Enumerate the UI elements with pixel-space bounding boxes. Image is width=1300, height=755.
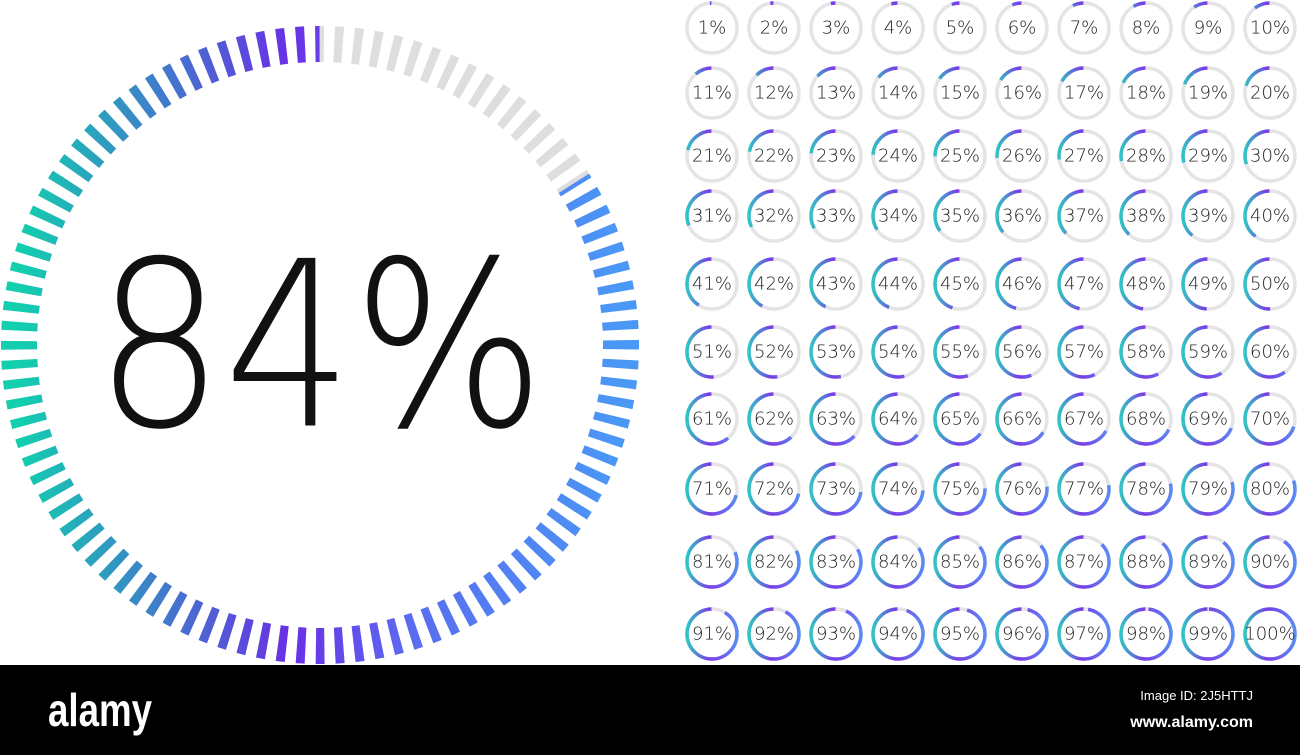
row 2 [687, 68, 1295, 118]
row 8: 72% [754, 478, 794, 500]
row 9: 90% [1250, 552, 1290, 572]
row 10: 96% [1002, 624, 1042, 644]
row 3: 30% [1250, 146, 1290, 166]
row 7: 65% [940, 408, 980, 430]
row 2: 15% [940, 82, 980, 104]
row 8: 78% [1126, 478, 1166, 500]
row 4: 39% [1188, 206, 1228, 226]
row 4: 34% [878, 206, 918, 226]
row 10: 97% [1064, 624, 1104, 644]
row 2: 19% [1188, 82, 1228, 104]
row 10: 93% [816, 624, 856, 644]
row 4: 35% [940, 206, 980, 226]
row 1: 9% [1194, 18, 1222, 38]
row 9: 85% [940, 552, 980, 572]
row 2: 13% [816, 82, 856, 104]
row 10 [687, 609, 1296, 659]
row 9: 81% [692, 552, 732, 572]
row 2: 11% [692, 82, 732, 104]
row 5: 47% [1064, 274, 1104, 294]
row 7: 69% [1188, 408, 1228, 430]
website: www.alamy.com [1129, 714, 1253, 731]
row 6 [687, 327, 1295, 377]
row 6: 52% [754, 342, 794, 362]
row 3: 28% [1126, 146, 1166, 166]
row 6: 59% [1188, 342, 1228, 362]
row 3: 21% [692, 146, 732, 166]
row 9: 88% [1126, 552, 1166, 572]
row 9: 83% [816, 552, 856, 572]
row 1: 6% [1008, 18, 1036, 38]
row 1: 10% [1250, 18, 1290, 38]
row 8: 80% [1250, 478, 1290, 500]
row 8 [687, 464, 1295, 514]
row 5: 50% [1250, 274, 1290, 294]
row 1: 4% [884, 18, 912, 38]
image id: Image ID: 2J5HTTJ [1140, 688, 1253, 703]
row 6: 54% [878, 342, 918, 362]
row 1: 2% [760, 18, 788, 38]
row 7: 62% [754, 408, 794, 430]
row 4: 33% [816, 206, 856, 226]
row 3: 22% [754, 146, 794, 166]
row 5: 48% [1126, 274, 1166, 294]
row 8: 73% [816, 478, 856, 500]
row 8: 79% [1188, 478, 1228, 500]
row 6: 57% [1064, 342, 1104, 362]
grid of small percentage dials [687, 3, 1296, 659]
row 8: 74% [878, 478, 918, 500]
row 3: 23% [816, 146, 856, 166]
row 1: 5% [946, 18, 974, 38]
row 3: 29% [1188, 146, 1228, 166]
row 9 [687, 537, 1295, 587]
row 8: 75% [940, 478, 980, 500]
row 5: 43% [816, 274, 856, 294]
row 5: 41% [692, 274, 732, 294]
row 5: 49% [1188, 274, 1228, 294]
row 10: 92% [754, 624, 794, 644]
row 6: 56% [1002, 342, 1042, 362]
row 4: 32% [754, 206, 794, 226]
row 10: 95% [940, 624, 980, 644]
row 4: 40% [1250, 206, 1290, 226]
big percentage text: 84% [95, 214, 545, 480]
row 7: 67% [1064, 408, 1104, 430]
row 9: 89% [1188, 552, 1228, 572]
row 3: 25% [940, 146, 980, 166]
row 7: 61% [692, 408, 732, 430]
row 3 [687, 131, 1295, 181]
logo: alamy: alamy [48, 684, 152, 736]
row 5: 45% [940, 274, 980, 294]
row 7: 64% [878, 408, 918, 430]
row 9: 84% [878, 552, 918, 572]
row 6: 60% [1250, 342, 1290, 362]
row 2: 20% [1250, 82, 1290, 104]
row 1: 7% [1070, 18, 1098, 38]
row 7: 70% [1250, 408, 1290, 430]
row 7: 66% [1002, 408, 1042, 430]
row 1: 3% [822, 18, 850, 38]
row 9: 87% [1064, 552, 1104, 572]
row 4: 36% [1002, 206, 1042, 226]
row 2: 12% [754, 82, 794, 104]
row 8: 76% [1002, 478, 1042, 500]
row 7 [687, 394, 1295, 444]
row 6: 53% [816, 342, 856, 362]
footer bar [0, 665, 1300, 755]
row 7: 68% [1126, 408, 1166, 430]
row 8: 71% [692, 478, 732, 500]
row 2: 14% [878, 82, 918, 104]
row 4: 37% [1064, 206, 1104, 226]
row 4: 31% [692, 206, 732, 226]
row 10: 100% [1244, 624, 1296, 644]
row 5: 44% [878, 274, 918, 294]
row 2: 18% [1126, 82, 1166, 104]
row 1: 8% [1132, 18, 1160, 38]
row 10: 91% [692, 624, 732, 644]
row 3: 24% [878, 146, 918, 166]
row 7: 63% [816, 408, 856, 430]
row 6: 55% [940, 342, 980, 362]
row 9: 86% [1002, 552, 1042, 572]
row 5: 42% [754, 274, 794, 294]
row 5: 46% [1002, 274, 1042, 294]
row 6: 58% [1126, 342, 1166, 362]
row 10: 94% [878, 624, 918, 644]
row 2: 16% [1002, 82, 1042, 104]
row 9: 82% [754, 552, 794, 572]
row 8: 77% [1064, 478, 1104, 500]
row 2: 17% [1064, 82, 1104, 104]
row 4: 38% [1126, 206, 1166, 226]
row 3: 27% [1064, 146, 1104, 166]
row 1: 1% [698, 18, 726, 38]
row 10: 99% [1188, 624, 1228, 644]
row 5 [687, 259, 1295, 309]
row 4 [687, 191, 1295, 241]
row 10: 98% [1126, 624, 1166, 644]
row 1 [687, 3, 1295, 53]
row 6: 51% [692, 342, 732, 362]
row 3: 26% [1002, 146, 1042, 166]
